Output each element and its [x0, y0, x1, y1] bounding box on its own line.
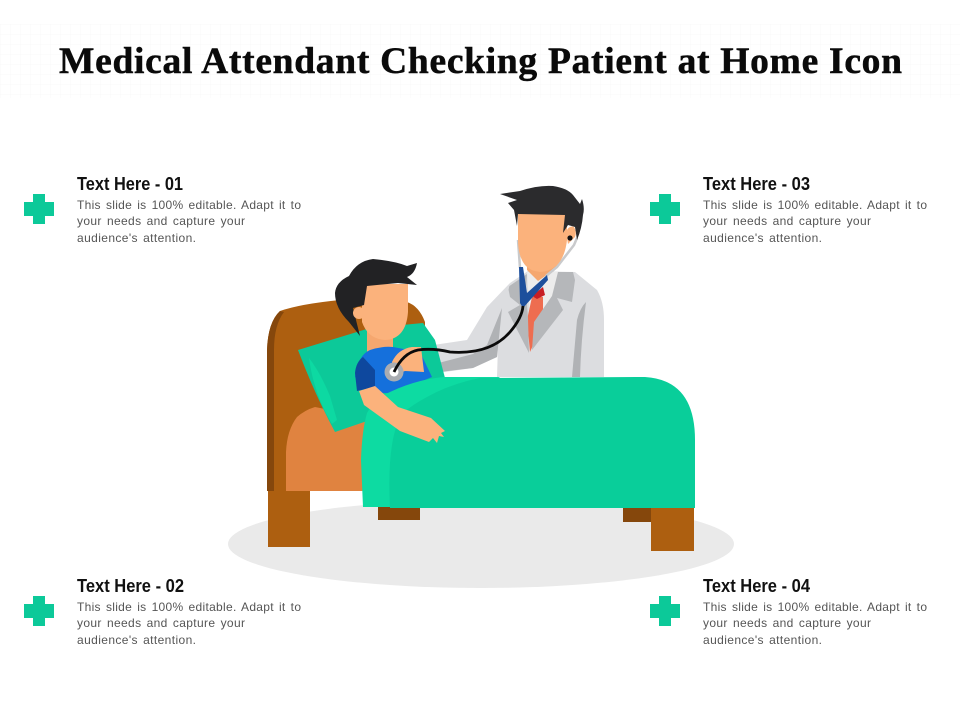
doctor hair [500, 186, 584, 240]
patient hair [335, 259, 417, 336]
headboard side [267, 311, 284, 491]
blanket [361, 377, 695, 508]
bed back [267, 300, 653, 547]
body 03 [703, 198, 927, 245]
body 03: your needs and capture your [703, 214, 871, 228]
pillow highlight [309, 358, 337, 424]
body 04: your needs and capture your [703, 616, 871, 630]
doctor [420, 186, 604, 377]
stethoscope yoke [519, 267, 548, 308]
left lapel [508, 274, 529, 353]
patient shirt [355, 347, 432, 393]
icon: plus 03 [650, 194, 680, 224]
neck [527, 262, 558, 281]
body 02 [77, 600, 301, 647]
patient neck [367, 330, 393, 352]
patient ear [353, 307, 365, 319]
heading 03: Text Here - 03 [703, 174, 810, 194]
front right leg [651, 508, 694, 551]
patient sleeve [355, 357, 375, 391]
body 01: This slide is 100% editable. Adapt it to [77, 198, 301, 212]
title: Medical Attendant Checking Patient at Home Icon [59, 41, 902, 82]
floor shadow [228, 500, 734, 588]
body 04: audience's attention. [703, 633, 822, 647]
text block 03 [650, 174, 927, 245]
icon: plus 04 [650, 596, 680, 626]
heading 01: Text Here - 01 [77, 174, 183, 194]
stethoscope chest piece [384, 362, 404, 382]
body 03: audience's attention. [703, 231, 822, 245]
headboard [267, 300, 425, 491]
body 01: audience's attention. [77, 231, 196, 245]
stethoscope cable [394, 306, 523, 372]
doctor coat [497, 271, 604, 377]
body 04 [703, 600, 927, 647]
body 03: This slide is 100% editable. Adapt it to [703, 198, 927, 212]
right lapel [532, 272, 575, 350]
blanket fold [361, 377, 500, 507]
stethoscope tubes [518, 238, 577, 276]
text block 02 [24, 576, 301, 647]
heading 04: Text Here - 04 [703, 576, 810, 596]
patient torso [335, 259, 432, 393]
body 04: This slide is 100% editable. Adapt it to [703, 600, 927, 614]
body 02: audience's attention. [77, 633, 196, 647]
body 01 [77, 198, 301, 245]
illustration: doctor checking patient in bed [228, 186, 734, 588]
doctor ear [566, 227, 576, 244]
mattress [286, 407, 380, 491]
doctor arm [420, 283, 510, 375]
doctor head [518, 212, 567, 272]
tie [527, 297, 543, 352]
blanket main [389, 377, 695, 508]
shirt [527, 272, 558, 325]
patient head [362, 284, 408, 340]
heading 02: Text Here - 02 [77, 576, 184, 596]
body 02: This slide is 100% editable. Adapt it to [77, 600, 301, 614]
patient arm [359, 386, 445, 443]
doctor hand [392, 347, 424, 375]
body 02: your needs and capture your [77, 616, 245, 630]
body 01: your needs and capture your [77, 214, 245, 228]
icon: plus 02 [24, 596, 54, 626]
icon: plus 01 [24, 194, 54, 224]
text block 04 [650, 576, 927, 647]
back legs [378, 500, 420, 520]
text block 01 [24, 174, 301, 245]
coat fold [572, 302, 586, 377]
front left leg [268, 491, 310, 547]
pillow [298, 323, 445, 432]
